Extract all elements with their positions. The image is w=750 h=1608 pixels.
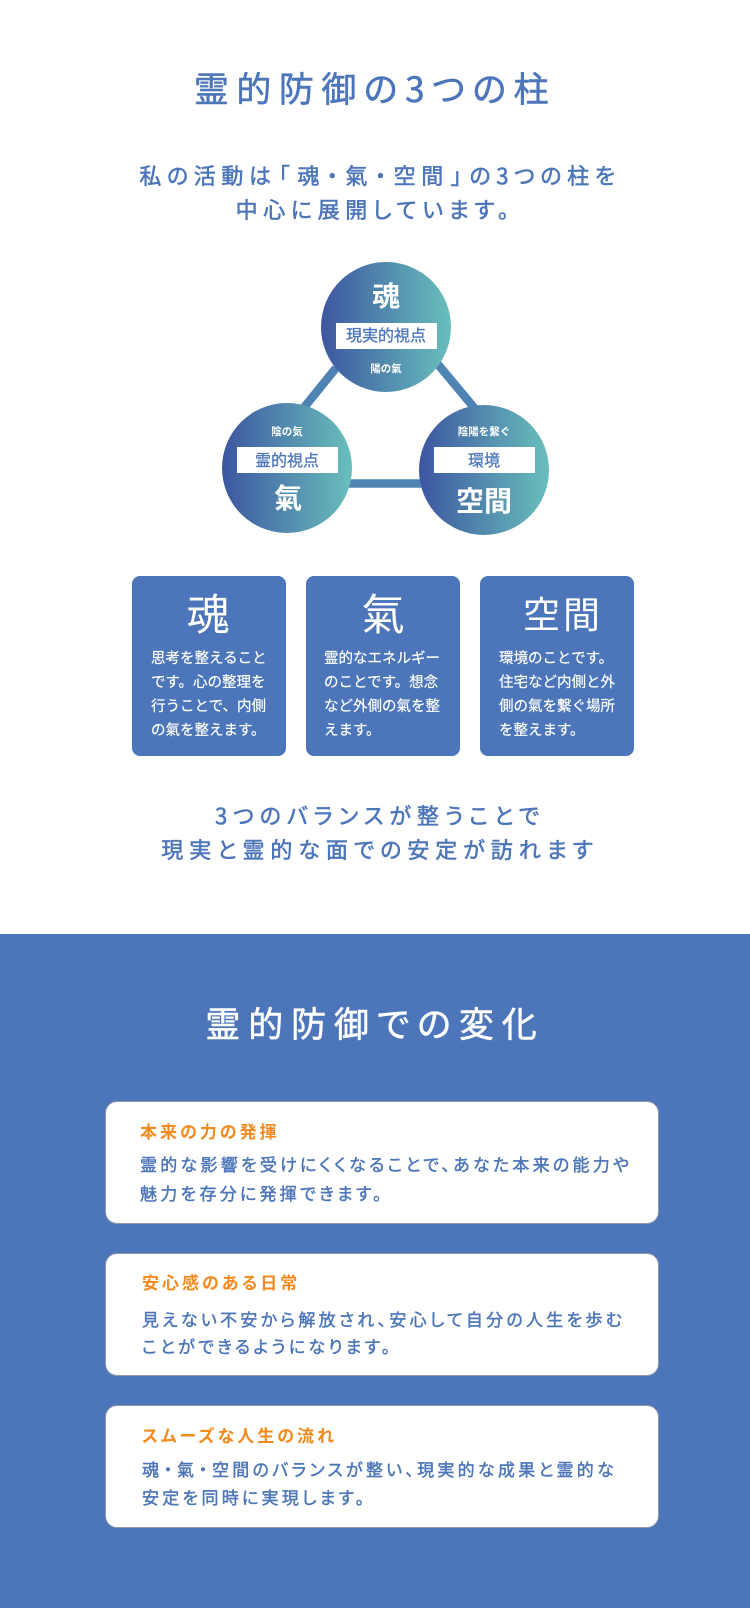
card: 氣 <box>306 576 460 756</box>
benefit card 3: 魂・氣・空間のバランスが整い、現実的な成果と霊的な <box>142 1456 617 1481</box>
benefit card 1: 本来の力の発揮 <box>140 1118 280 1143</box>
node: 空間: 環境 <box>468 447 500 471</box>
card: 魂: 行うことで、内側 <box>151 695 266 716</box>
benefit card 2 <box>105 1253 659 1376</box>
benefit card 2: 安心感のある日常 <box>142 1269 300 1294</box>
benefit card 2: ことができるようになります。 <box>142 1333 393 1358</box>
benefit card 3: 安定を同時に実現します。 <box>142 1484 367 1509</box>
node: 魂: 魂 <box>372 275 400 315</box>
node: 魂 <box>321 262 451 392</box>
node: 氣: 陰の気 <box>271 424 303 439</box>
card: 氣: 霊的なエネルギー <box>324 647 440 668</box>
benefit card 1 <box>105 1101 659 1224</box>
benefit card 1: 魅力を存分に発揮できます。 <box>140 1180 385 1205</box>
blue section <box>0 934 750 1608</box>
intro text: 中心に展開しています。 <box>236 193 514 225</box>
benefit card 2: 見えない不安から解放され、安心して自分の人生を歩む <box>142 1306 625 1331</box>
node: 魂: 現実的視点 <box>346 322 426 346</box>
benefit card 3 <box>105 1405 659 1528</box>
summary text <box>161 799 599 865</box>
triangle diagram <box>222 262 549 535</box>
node: 氣 <box>222 403 352 533</box>
summary text: 現実と霊的な面での安定が訪れます <box>161 833 599 865</box>
intro text: 私の活動は「魂・氣・空間」の3つの柱を <box>139 159 621 191</box>
title: 霊的防御の3つの柱 <box>194 62 556 113</box>
card: 空間: 環境のことです。 <box>499 647 613 668</box>
card: 氣: など外側の氣を整 <box>324 695 440 716</box>
intro text <box>139 159 621 225</box>
card: 氣: 氣 <box>362 581 404 643</box>
card: 空間: 空間 <box>523 585 603 639</box>
card: 魂: 思考を整えること <box>151 647 267 668</box>
card: 魂: です。心の整理を <box>151 671 266 692</box>
card: 空間 <box>480 576 634 756</box>
node: 氣: 霊的視点 <box>255 447 319 471</box>
node: 空間: 陰陽を繋ぐ <box>458 424 510 439</box>
node: 魂: 陽の氣 <box>370 361 402 376</box>
card: 氣: のことです。想念 <box>324 671 438 692</box>
card: 魂 <box>132 576 286 756</box>
card: 空間: を整えます。 <box>499 719 585 740</box>
section heading: 霊的防御での変化 <box>205 997 545 1048</box>
node: 空間 <box>419 405 549 535</box>
benefit card 1: 霊的な影響を受けにくくなることで、あなた本来の能力や <box>140 1151 632 1176</box>
card: 氣: えます。 <box>324 719 381 740</box>
card: 魂: の氣を整えます。 <box>151 719 266 740</box>
connector lines <box>302 362 476 484</box>
node: 空間: 空間 <box>456 480 512 520</box>
benefit card 3: スムーズな人生の流れ <box>142 1422 337 1447</box>
summary text: 3つのバランスが整うことで <box>215 799 545 831</box>
card: 空間: 住宅など内側と外 <box>499 671 615 692</box>
node: 氣: 氣 <box>274 477 302 517</box>
card: 空間: 側の氣を繋ぐ場所 <box>499 695 615 716</box>
card: 魂: 魂 <box>186 581 230 643</box>
